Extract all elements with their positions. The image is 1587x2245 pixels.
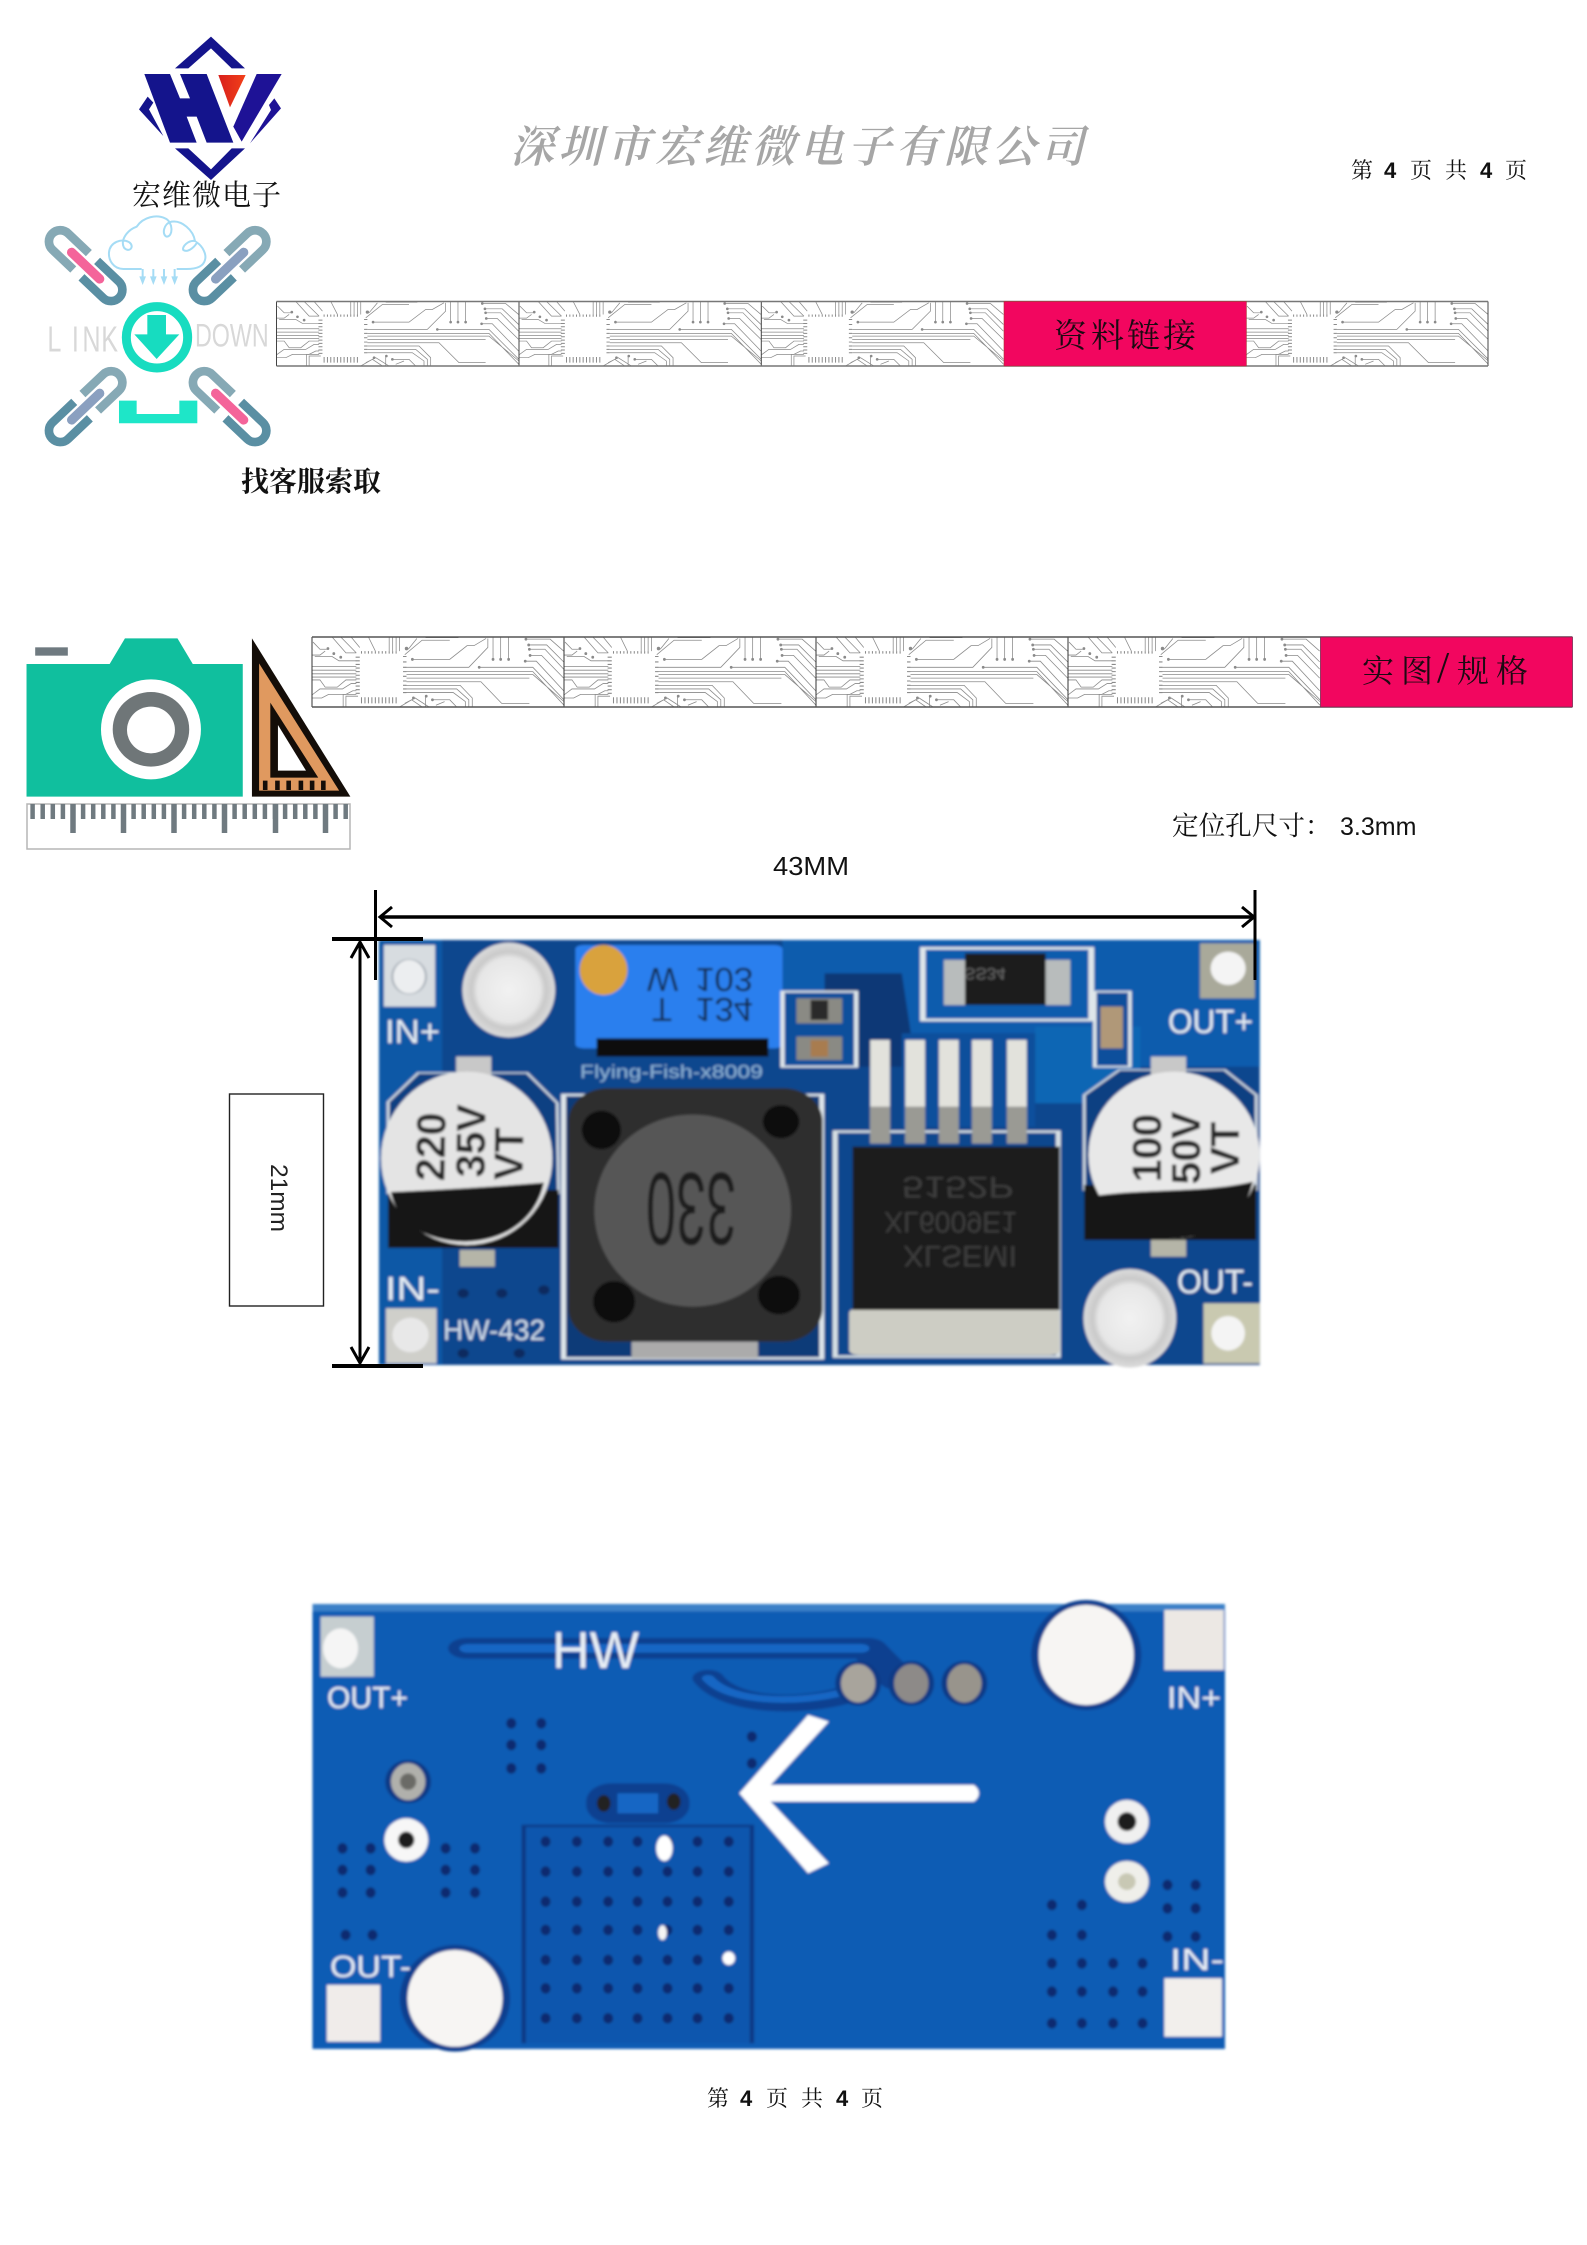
IC markings: XL6009E1	[884, 1205, 1017, 1238]
potentiometer markings: W	[647, 961, 679, 998]
page number header: 4	[1480, 158, 1493, 183]
icon: link clip top right	[188, 226, 271, 306]
board silkscreen: IN-	[1170, 1942, 1224, 1977]
page number footer: 4	[836, 2086, 849, 2111]
IC markings: XLSEMI	[903, 1239, 1017, 1272]
label: DOWN: DOWN	[195, 318, 269, 354]
dimension arrow: width	[376, 890, 1255, 980]
page number header: 共	[1445, 158, 1467, 183]
icon: link clip bottom right	[188, 367, 271, 447]
company title: 深圳市宏维微电子有限公司	[510, 123, 1089, 172]
IC markings	[884, 964, 1017, 1272]
icon: camera	[27, 638, 243, 797]
text: mounting hole size: 3.3mm	[1340, 813, 1416, 841]
board silkscreen: OUT+	[327, 1680, 408, 1715]
page number footer: 共	[801, 2086, 823, 2111]
photo: PCB bottom view	[312, 1600, 1225, 2052]
text: mounting hole size	[1172, 811, 1416, 841]
banner label: 资料链接	[1054, 318, 1197, 355]
page number header: 4	[1384, 158, 1397, 183]
banner label: 图	[1401, 653, 1433, 689]
banner: photo and specs	[311, 637, 1573, 707]
board silkscreen: HW-432	[443, 1315, 545, 1347]
potentiometer markings: T	[652, 991, 672, 1028]
capacitor markings: 50V	[1163, 1111, 1209, 1184]
board silkscreen: OUT-	[1177, 1263, 1253, 1300]
icon: set square	[252, 638, 350, 797]
inductor marking: 330	[646, 1150, 736, 1267]
capacitor markings: 100	[1124, 1114, 1170, 1182]
label: LINK: LINK	[47, 319, 118, 360]
banner label: 格	[1496, 653, 1528, 689]
board silkscreen: Flying-Fish-x8009	[580, 1062, 763, 1082]
logo: HV diamond mark	[139, 37, 282, 180]
dimension arrow: height	[332, 939, 423, 1366]
banner label: 规	[1457, 653, 1489, 689]
page number header: 页	[1410, 158, 1432, 183]
board silkscreen	[385, 1003, 1253, 1347]
photo: PCB top view	[379, 940, 1260, 1368]
capacitor markings: 35V	[447, 1103, 495, 1178]
page number footer: 页	[766, 2086, 788, 2111]
potentiometer markings: 134	[695, 991, 753, 1028]
banner label	[1320, 637, 1572, 707]
icon: download circle	[126, 307, 188, 368]
dimension: 21mm label box	[230, 1094, 324, 1306]
page number footer: 第	[707, 2086, 729, 2111]
banner: download link	[276, 302, 1488, 366]
icon: cloud	[109, 216, 205, 285]
capacitor markings: VT	[486, 1127, 532, 1180]
page number footer: 4	[740, 2086, 753, 2111]
dimension: 21mm label box: 21mm	[265, 1164, 292, 1232]
capacitor markings	[407, 1103, 1248, 1184]
board silkscreen: IN+	[385, 1013, 440, 1050]
icon: download tray	[119, 401, 197, 423]
potentiometer markings	[647, 961, 753, 1028]
board silkscreen: OUT-	[330, 1949, 411, 1984]
board silkscreen: IN-	[385, 1270, 440, 1307]
text: mounting hole size: 定位孔尺寸：	[1172, 811, 1332, 841]
logo caption: 宏维微电子	[132, 179, 282, 212]
capacitor markings: 220	[407, 1112, 455, 1181]
banner label: /	[1437, 643, 1450, 692]
icon: link clip top left	[44, 226, 127, 306]
banner label	[1004, 302, 1246, 366]
text: ask customer service: 找客服索取	[241, 466, 381, 498]
potentiometer markings: 103	[695, 961, 753, 998]
page number footer: 页	[861, 2086, 883, 2111]
board silkscreen: OUT+	[1168, 1003, 1253, 1040]
page number header: 页	[1505, 158, 1527, 183]
icon: link clip bottom left	[44, 367, 127, 447]
board silkscreen: IN+	[1167, 1680, 1221, 1715]
banner label: 实	[1362, 653, 1394, 689]
capacitor markings: VT	[1202, 1122, 1248, 1174]
icon: link and download	[44, 216, 271, 447]
board silkscreen: HW	[552, 1622, 639, 1680]
IC markings: SS34	[964, 964, 1006, 983]
board silkscreen	[327, 1622, 1224, 1984]
page number header: 第	[1351, 158, 1373, 183]
IC markings: 5152P	[902, 1170, 1014, 1203]
dimension: 43MM label: 43MM	[773, 851, 849, 881]
icon: ruler	[27, 804, 350, 849]
